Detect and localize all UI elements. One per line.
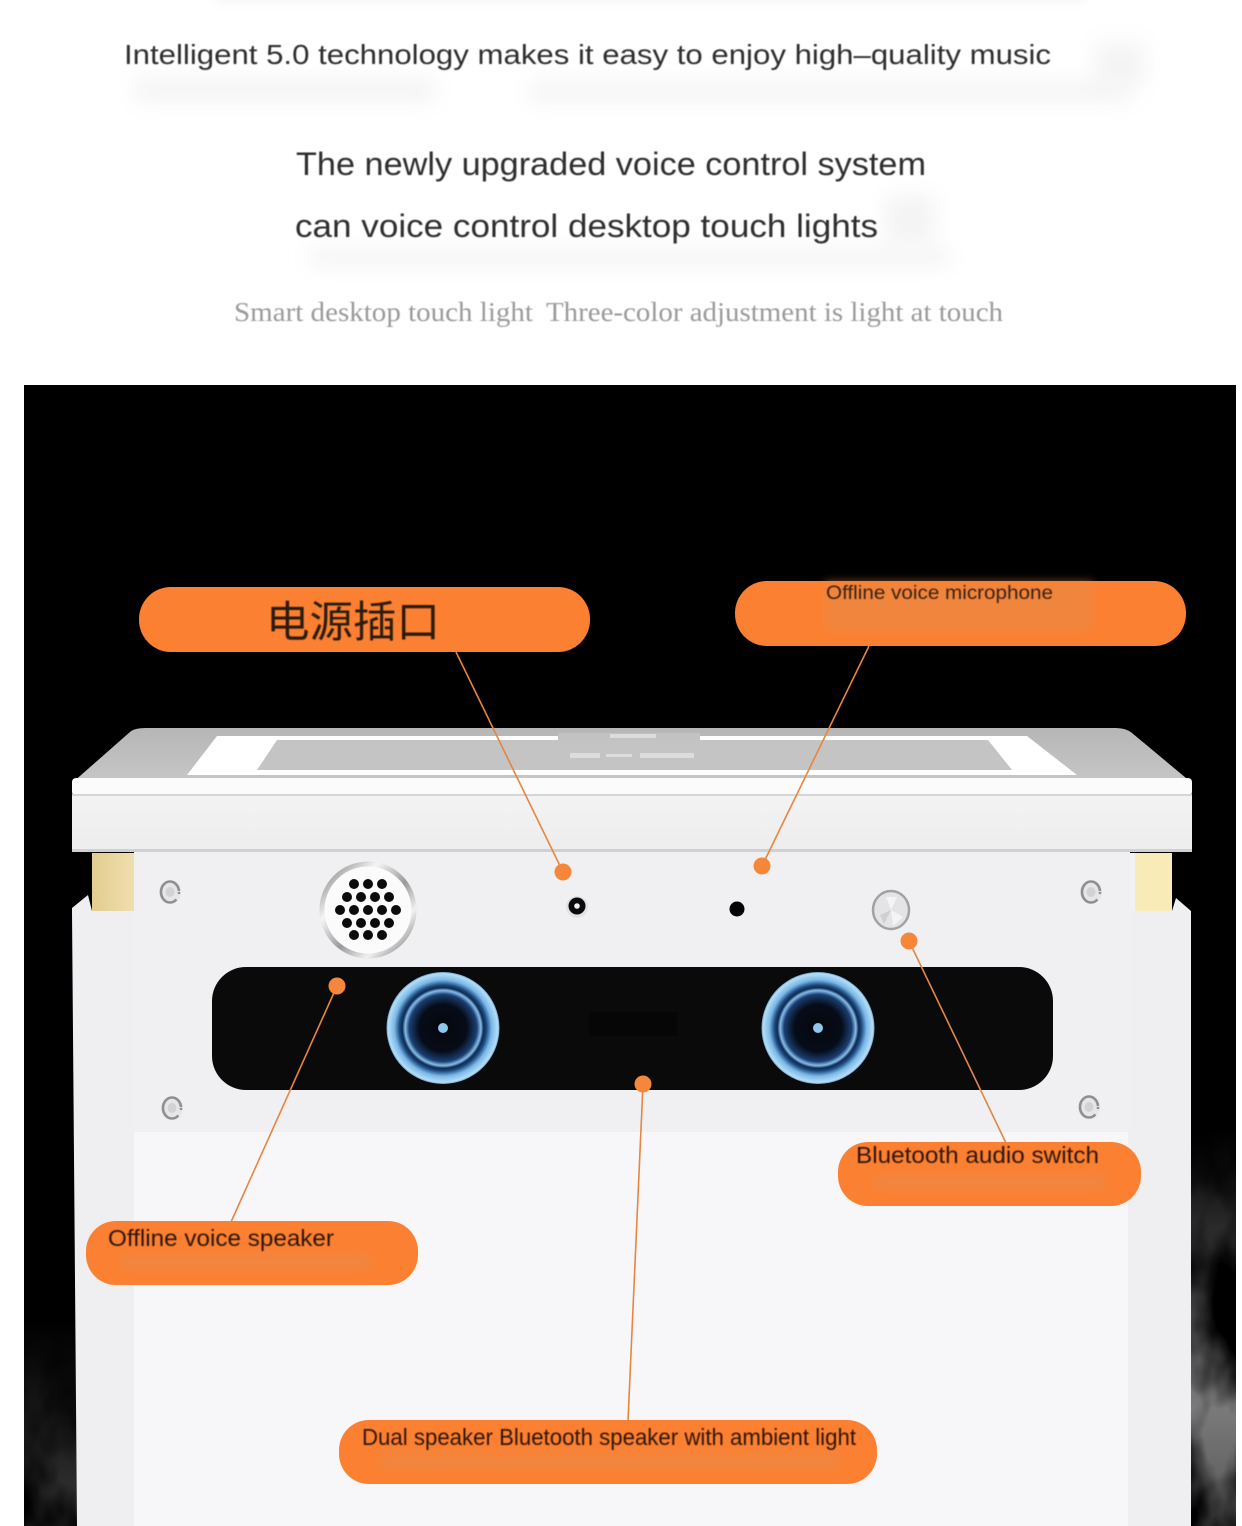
white touch panel on top (187, 736, 1077, 775)
smoke at lower left (24, 1320, 78, 1526)
headline: voice control line 1: The newly upgraded voice control system (296, 146, 926, 182)
bluetooth button (873, 891, 909, 929)
lid front edge (72, 778, 1192, 796)
speaker strip (212, 967, 1053, 1090)
headline: bluetooth music: Intelligent 5.0 technology makes it easy to enjoy high–quality music (124, 39, 1051, 70)
corner screw top right (1080, 880, 1102, 904)
right blue speaker ring (762, 972, 874, 1084)
corner screw bottom right (1078, 1095, 1100, 1119)
smoke at lower right (1188, 1130, 1236, 1526)
subtitle (234, 297, 1004, 327)
callout: offline voice microphone: Offline voice microphone (826, 583, 1053, 604)
gold hinge left (92, 853, 135, 911)
callout: bluetooth audio switch (838, 1142, 1141, 1206)
leader: microphone (754, 646, 869, 874)
microphone hole (730, 902, 744, 916)
grey gap in top white edge (558, 733, 700, 741)
header text block (124, 0, 1145, 327)
lower body side columns (72, 895, 135, 1526)
grey display on top (257, 740, 1012, 770)
callout: bluetooth audio switch: Bluetooth audio switch (856, 1142, 1099, 1168)
top face of lid (72, 728, 1192, 788)
speaker grille (322, 864, 414, 956)
headline: voice control line 2: can voice control desktop touch lights (295, 208, 878, 244)
leader: bluetooth switch (900, 932, 1006, 1143)
lower front panel (134, 1132, 1128, 1526)
product: speaker device front view (72, 728, 1192, 1526)
lid front (72, 796, 1192, 851)
corner screw bottom left (161, 1096, 183, 1120)
corner screw top left (159, 880, 181, 904)
callout: dual speaker: Dual speaker Bluetooth speaker with ambient light (362, 1424, 857, 1450)
leader: offline speaker (231, 978, 346, 1222)
callout: offline voice speaker (86, 1221, 418, 1285)
callout: dual speaker (339, 1420, 877, 1484)
callout: power port (139, 587, 590, 652)
callout: offline voice speaker: Offline voice speaker (108, 1225, 334, 1251)
leader: dual speaker (628, 1076, 652, 1421)
callout: power port: 电源插口 (266, 588, 440, 650)
callout: offline voice microphone (735, 581, 1186, 646)
power jack (566, 896, 588, 918)
subtitle: Smart desktop touch light (234, 297, 534, 327)
panel: black product background (24, 385, 1236, 1526)
leader: power port (456, 652, 572, 880)
left blue speaker ring (386, 972, 500, 1084)
subtitle: Three-color adjustment is light at touch (546, 297, 1004, 327)
top display markings (570, 734, 694, 758)
faint display window (589, 1012, 677, 1036)
gold hinge right (1128, 853, 1172, 911)
callout leader lines and dots (231, 646, 1006, 1421)
control plate (134, 852, 1130, 1134)
blurred reflection bands (135, 0, 1145, 266)
